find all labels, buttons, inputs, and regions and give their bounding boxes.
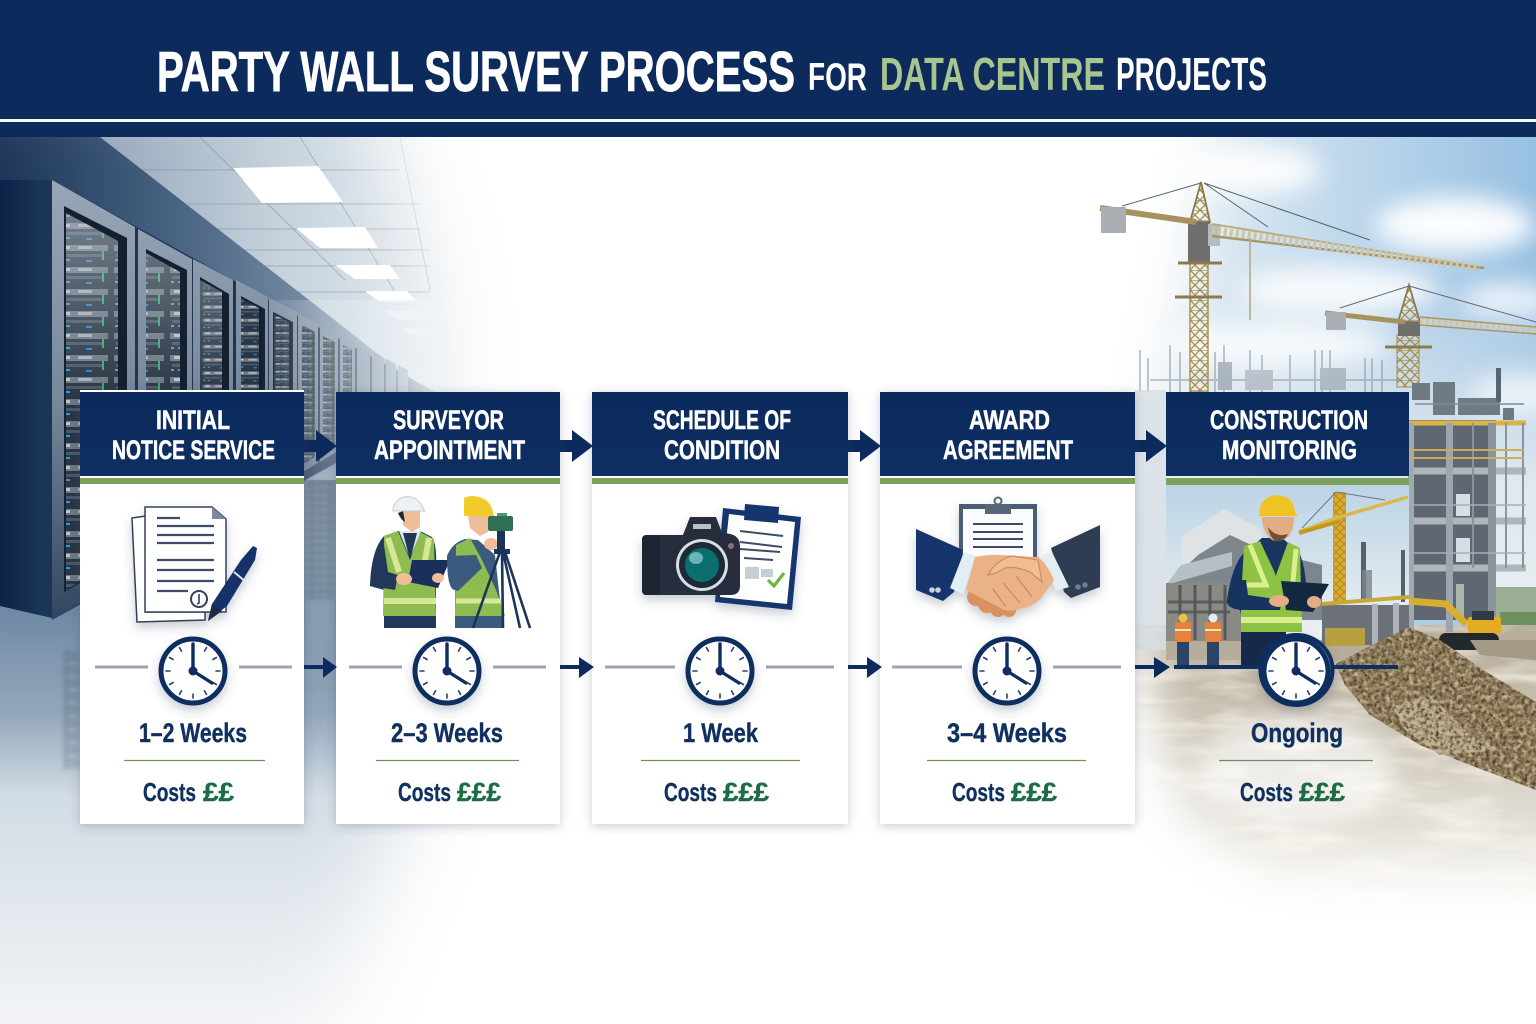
sky bbox=[1162, 137, 1536, 625]
cost: ££ bbox=[203, 777, 235, 807]
panel: step 4 award agreement bbox=[880, 392, 1135, 824]
cost bbox=[1240, 777, 1346, 807]
cost: Costs bbox=[143, 777, 196, 807]
distant landscape bbox=[1496, 587, 1536, 618]
panel: step 5 construction monitoring bbox=[1135, 392, 1536, 825]
duration: 3–4 Weeks bbox=[947, 718, 1067, 748]
duration: 2–3 Weeks bbox=[391, 718, 503, 748]
heading line 2: CONDITION bbox=[664, 435, 780, 465]
faded building left of card 5 bbox=[1135, 390, 1166, 650]
concrete building under construction bbox=[1409, 368, 1526, 632]
cost: £££ bbox=[1299, 777, 1346, 807]
icon: handshake and clipboard bbox=[916, 498, 1100, 617]
heading line 1: INITIAL bbox=[156, 405, 230, 435]
arrow: timeline step 4 to 5 bbox=[1135, 657, 1170, 678]
inset low structure bbox=[1322, 605, 1409, 645]
timeline bar bbox=[1174, 665, 1398, 669]
arrow: timeline step 2 to 3 bbox=[560, 657, 594, 678]
inset tower crane bbox=[1333, 492, 1346, 602]
excavator bbox=[1409, 601, 1501, 650]
cost bbox=[952, 777, 1058, 807]
arrow: header step 4 to 5 bbox=[1135, 430, 1167, 462]
heading line 2: APPOINTMENT bbox=[374, 435, 525, 465]
white fade behind card 5 text bbox=[1196, 715, 1396, 825]
arrow: header step 3 to 4 bbox=[848, 430, 881, 462]
floor bbox=[0, 463, 432, 1024]
duration: 1–2 Weeks bbox=[139, 718, 247, 748]
cost: Costs bbox=[664, 777, 717, 807]
cost bbox=[398, 777, 502, 807]
cost: Costs bbox=[1240, 777, 1293, 807]
tower crane small bbox=[1325, 285, 1536, 387]
cost: Costs bbox=[952, 777, 1005, 807]
panel: step 2 surveyor appointment bbox=[336, 392, 560, 824]
ground bbox=[1135, 625, 1536, 890]
duration: 1 Week bbox=[683, 718, 759, 748]
heading line 2: NOTICE SERVICE bbox=[112, 435, 275, 465]
floor reflections bbox=[63, 470, 336, 770]
arrow: timeline step 1 to 2 bbox=[304, 657, 337, 678]
panel: step 1 initial notice service bbox=[80, 390, 304, 824]
arrow: timeline step 3 to 4 bbox=[848, 657, 882, 678]
clock and timeline bbox=[349, 639, 546, 703]
clouds bbox=[1170, 146, 1536, 415]
heading line 1: SURVEYOR bbox=[393, 405, 504, 435]
icon: two surveyors with tripod bbox=[370, 496, 530, 628]
inset construction scene bbox=[1166, 485, 1409, 660]
server rack row bbox=[0, 180, 450, 620]
panel: step 3 schedule of condition bbox=[592, 392, 848, 824]
figures: site workers bbox=[1175, 614, 1221, 666]
panel: construction site background photo bbox=[1100, 137, 1536, 890]
cost: £££ bbox=[457, 777, 502, 807]
right surveyor body bbox=[447, 539, 503, 628]
heading line 1: AWARD bbox=[969, 405, 1050, 435]
tower crane large bbox=[1100, 182, 1484, 392]
heading line 2: AGREEMENT bbox=[943, 435, 1073, 465]
clock and timeline bbox=[605, 639, 834, 703]
heading line 1: CONSTRUCTION bbox=[1210, 405, 1368, 435]
soffit above racks bbox=[0, 137, 398, 371]
heading line 1: SCHEDULE OF bbox=[653, 405, 791, 435]
icon: camera and clipboard checklist bbox=[642, 504, 801, 610]
rooftop rebar and tanks bbox=[1140, 345, 1400, 392]
ceiling bbox=[100, 137, 463, 392]
clock and timeline bbox=[95, 639, 292, 703]
title text: data centre: DATA CENTRE bbox=[880, 48, 1105, 100]
cost: Costs bbox=[398, 777, 451, 807]
figure: main inspector bbox=[1227, 495, 1329, 668]
inset office building bbox=[1181, 509, 1262, 600]
cost bbox=[664, 777, 770, 807]
icon: clock bbox=[1260, 635, 1332, 705]
left surveyor body bbox=[370, 531, 436, 628]
arrow: header step 1 to 2 bbox=[304, 430, 337, 462]
title text: main: PARTY WALL SURVEY PROCESS bbox=[157, 40, 795, 104]
clock and timeline bbox=[892, 639, 1121, 703]
title banner bbox=[0, 0, 1536, 137]
heading line 2: MONITORING bbox=[1222, 435, 1357, 465]
arrow: header step 2 to 3 bbox=[560, 430, 593, 462]
cost: £££ bbox=[1011, 777, 1058, 807]
icon: notice document and pen bbox=[132, 507, 257, 622]
title text: for: FOR bbox=[808, 56, 867, 99]
panel: data centre background photo bbox=[0, 137, 463, 1024]
dirt mound bbox=[1336, 627, 1536, 790]
title text: projects: PROJECTS bbox=[1116, 48, 1267, 100]
duration: Ongoing bbox=[1251, 718, 1343, 748]
cost: £££ bbox=[723, 777, 770, 807]
